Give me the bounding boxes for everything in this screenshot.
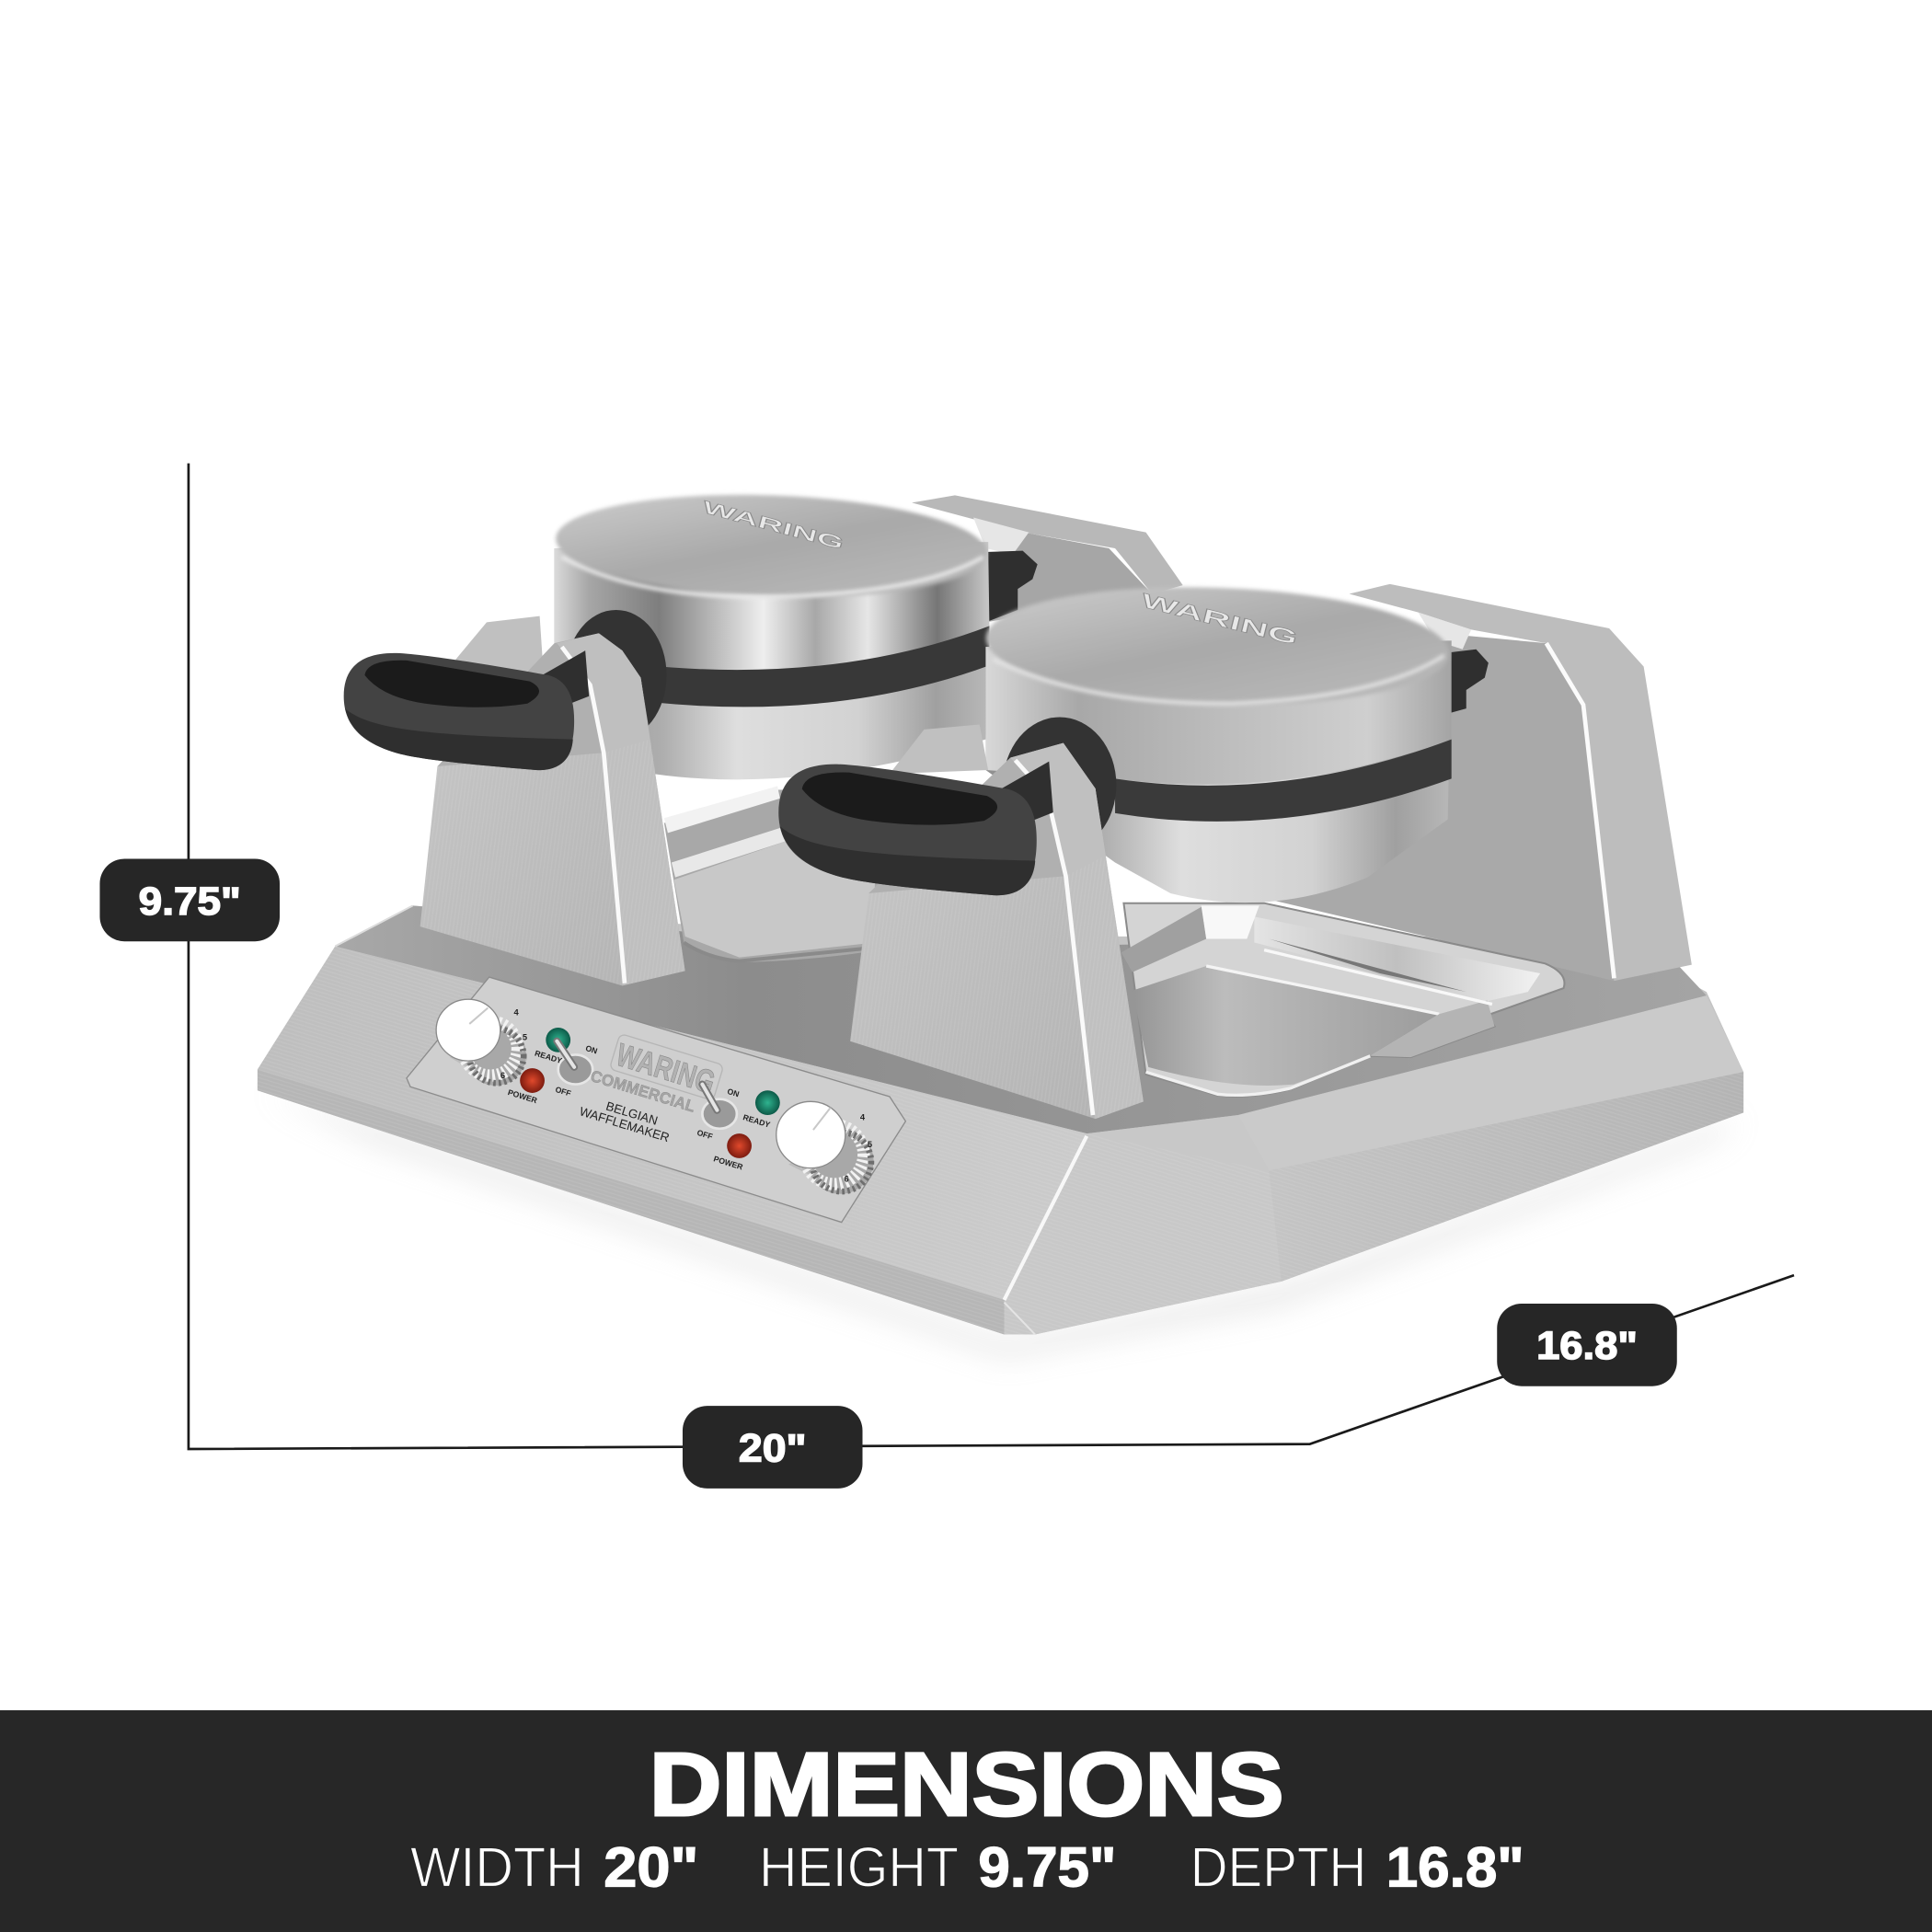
waffle maker product illustration	[258, 488, 1743, 1355]
banner specs: DEPTH	[1190, 1835, 1366, 1899]
logo outline	[609, 1033, 724, 1100]
right panel labels	[696, 1087, 772, 1172]
banner specs: 20"	[604, 1835, 698, 1899]
base shadow	[265, 1090, 1740, 1355]
left iron band	[647, 626, 989, 707]
left iron gasket	[566, 610, 667, 741]
right knob scale: 4	[860, 1112, 866, 1121]
right tray	[1121, 903, 1564, 1097]
depth label: 16.8"	[1536, 1324, 1638, 1368]
commercial logo: COMMERCIAL	[589, 1066, 698, 1116]
left knob scale: 4	[514, 1008, 520, 1018]
right panel labels: READY	[742, 1112, 772, 1130]
right knob	[776, 1101, 874, 1194]
right knob scale: 5	[868, 1140, 872, 1149]
back right post frame	[1350, 584, 1692, 981]
model name line one: BELGIAN	[604, 1099, 660, 1128]
left post	[420, 633, 685, 985]
banner specs	[410, 1835, 1524, 1899]
right panel labels: ON	[726, 1087, 741, 1098]
back right hinge clip	[1419, 613, 1471, 650]
right knob scale: 6	[844, 1174, 849, 1183]
model name line two: WAFFLEMAKER	[578, 1104, 672, 1144]
left knob scale	[500, 1008, 527, 1080]
banner specs: 16.8"	[1386, 1835, 1524, 1899]
right panel labels: OFF	[696, 1128, 714, 1141]
banner title: DIMENSIONS	[650, 1734, 1284, 1834]
left toggle switch	[557, 1041, 592, 1085]
right handle	[778, 762, 1053, 895]
control panel	[407, 977, 905, 1223]
left iron lid	[554, 488, 989, 604]
back right post edge	[1547, 643, 1614, 978]
banner specs: WIDTH	[410, 1835, 584, 1899]
right iron lid	[983, 580, 1451, 711]
right iron body	[983, 580, 1452, 903]
right iron hinge	[1444, 650, 1489, 715]
right knob scale	[844, 1112, 872, 1183]
left knob scale: 6	[500, 1071, 505, 1080]
dimension lines	[189, 464, 1794, 1449]
left knob	[436, 999, 527, 1087]
left ready light	[546, 1028, 570, 1052]
right toggle switch	[702, 1085, 737, 1129]
back right post inner face	[1269, 635, 1614, 981]
right panel labels: POWER	[712, 1154, 744, 1172]
front right post	[850, 743, 1144, 1119]
depth label	[1497, 1304, 1677, 1386]
base	[258, 905, 1743, 1334]
back left post frame	[912, 495, 1183, 594]
right iron lid rim highlight	[993, 655, 1444, 704]
left panel labels: POWER	[507, 1087, 539, 1105]
left iron lid rim highlight	[562, 557, 983, 597]
left iron logo: WARING	[701, 497, 846, 553]
back hinge clip	[973, 517, 1029, 555]
waring logo: WARING	[612, 1037, 719, 1100]
width label: 20"	[739, 1426, 807, 1470]
right iron band	[1115, 740, 1452, 822]
height label: 9.75"	[139, 880, 241, 924]
left panel labels	[507, 1043, 599, 1105]
left iron body	[554, 488, 989, 779]
height label	[99, 858, 280, 941]
bottom banner	[0, 1710, 1932, 1932]
banner specs: HEIGHT	[759, 1835, 959, 1899]
left handle	[344, 650, 589, 770]
left power light	[520, 1068, 545, 1093]
left panel labels: OFF	[554, 1085, 572, 1098]
banner specs: 9.75"	[978, 1835, 1116, 1899]
left tray	[664, 786, 887, 962]
back left post inner face	[985, 530, 1152, 622]
left panel labels: READY	[534, 1049, 563, 1065]
width label	[683, 1406, 863, 1489]
left latch bracket	[456, 616, 544, 672]
right power light	[727, 1133, 752, 1158]
right iron gasket	[1003, 717, 1116, 853]
left iron hinge	[985, 551, 1038, 622]
left panel labels: ON	[584, 1043, 599, 1055]
left knob scale: 5	[523, 1032, 527, 1041]
right ready light	[755, 1090, 780, 1115]
right latch bracket	[890, 725, 988, 774]
right iron logo: WARING	[1139, 590, 1300, 650]
